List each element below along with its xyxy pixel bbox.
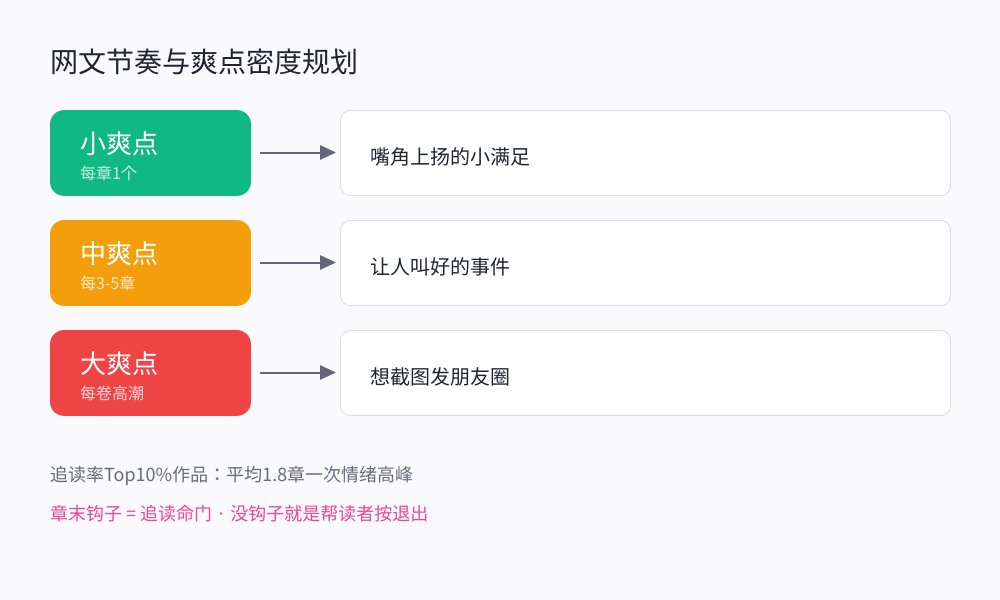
label card: big payoff xyxy=(50,330,251,416)
description card xyxy=(340,220,950,306)
description card xyxy=(340,110,950,196)
label card: big payoff: 大爽点 xyxy=(80,344,158,381)
description card: 嘴角上扬的小满足 xyxy=(370,141,530,170)
label card: big payoff: 每卷高潮 xyxy=(80,380,144,404)
description card xyxy=(340,330,950,416)
label card: small payoff: 小爽点 xyxy=(80,124,158,161)
description card: 想截图发朋友圈 xyxy=(370,361,510,390)
arrow xyxy=(260,145,336,160)
title: 网文节奏与爽点密度规划 xyxy=(50,41,358,81)
description card: 让人叫好的事件 xyxy=(370,251,510,280)
arrow xyxy=(260,365,336,380)
label card: small payoff: 每章1个 xyxy=(80,160,137,184)
row: medium payoff xyxy=(50,220,950,306)
label card: medium payoff: 中爽点 xyxy=(80,234,158,271)
label card: medium payoff xyxy=(50,220,251,306)
statistic note: 追读率Top10%作品：平均1.8章一次情绪高峰 xyxy=(50,461,413,487)
row: big payoff xyxy=(50,330,950,416)
hook note: 章末钩子 = 追读命门 · 没钩子就是帮读者按退出 xyxy=(50,500,428,526)
label card: small payoff xyxy=(50,110,251,196)
row: small payoff xyxy=(50,110,950,196)
arrow xyxy=(260,255,336,270)
label card: medium payoff: 每3-5章 xyxy=(80,270,135,294)
